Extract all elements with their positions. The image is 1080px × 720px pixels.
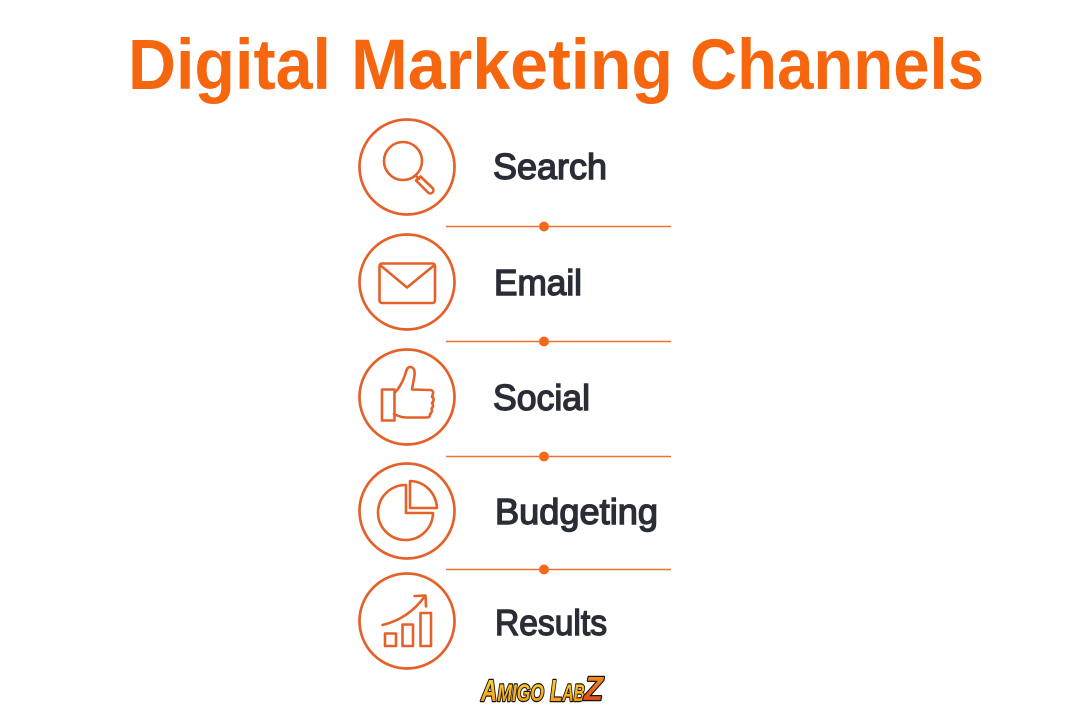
label: Search: Search: [493, 146, 607, 187]
logo: Amigo LabZ: LAB: [550, 673, 585, 708]
label: Email: Email: [494, 262, 582, 303]
logo: Amigo LabZ: [480, 670, 605, 708]
channel: Email: [360, 234, 582, 330]
divider 3: [446, 452, 671, 462]
channel: Search: [360, 120, 607, 214]
title: [128, 26, 984, 105]
title: Marketing: [351, 26, 673, 105]
title: Channels: [690, 26, 984, 105]
divider 1: [446, 222, 671, 232]
channel: Social: [360, 350, 590, 444]
label: Social: Social: [493, 377, 590, 418]
logo: Amigo LabZ: Z: [583, 670, 605, 707]
icon: thumbs up: [360, 350, 454, 444]
icon: magnifying glass: [360, 120, 454, 214]
icon: envelope: [360, 234, 454, 330]
title: Digital: [128, 26, 331, 105]
label: Results: Results: [495, 602, 607, 643]
logo: Amigo LabZ: AMIGO: [480, 673, 544, 708]
icon: growth chart: [360, 574, 454, 668]
channel: Results: [360, 574, 607, 668]
channel: Budgeting: [360, 464, 658, 558]
divider 2: [446, 336, 671, 346]
icon: pie chart: [360, 464, 454, 558]
label: Budgeting: Budgeting: [495, 491, 658, 532]
divider 4: [446, 564, 671, 574]
